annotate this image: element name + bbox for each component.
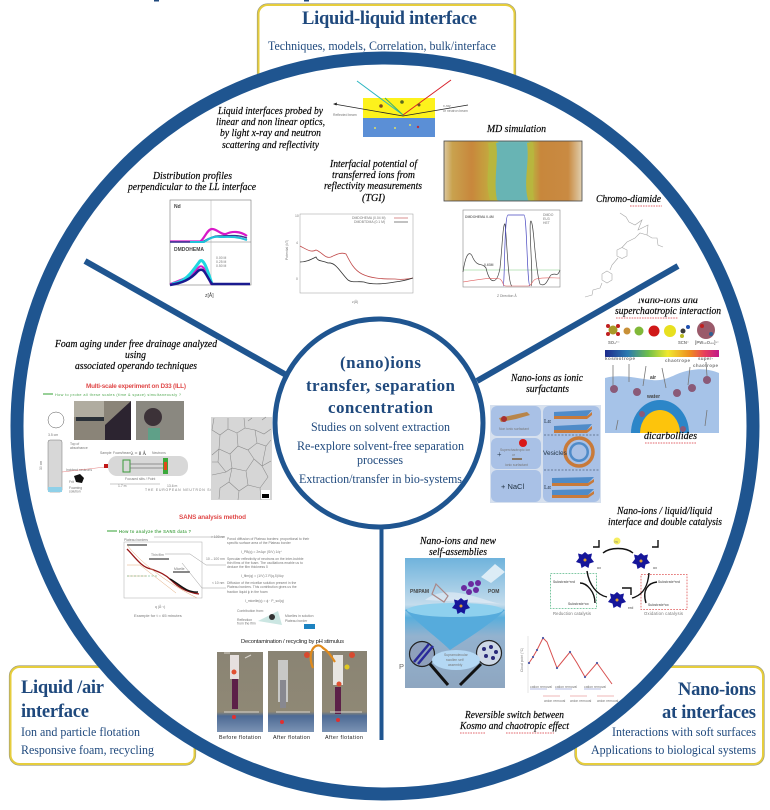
figure: superchaotropic series and assembly: super-: [698, 356, 714, 361]
figure: ionic surfactants panels: Vesicles: [543, 450, 568, 457]
figure: decontamination photos: [217, 639, 367, 741]
caption: nano-ions and superchaotropic: [615, 293, 721, 318]
figure: PNIPAM and POM self-assembly illustration: Supramolecular: [444, 653, 469, 657]
figure: SANS analysis method: < 10 nm: [212, 581, 225, 585]
caption: nano-ions as ionic surfactants: surfactants: [526, 384, 569, 395]
figure: double catalysis cycle: ox: [653, 566, 657, 570]
figure: D33 multi-scale experiment: 1.7 m: [118, 484, 127, 488]
chart: MD concentration profiles: EU3: [543, 217, 550, 221]
chart: reversible switch: anion removal: [570, 699, 592, 703]
figure: decontamination photos: Decontamination / recycling by pH stimulus: [241, 639, 344, 645]
caption: distribution profiles: [127, 171, 256, 193]
caption: nano-ions as ionic surfactants: Nano-ions as ionic: [510, 373, 583, 384]
chart: reversible switch: anion removal: [597, 699, 619, 703]
figure: PNIPAM and POM self-assembly illustration: POM: [488, 589, 499, 595]
chart: reversible switch: cation removal: [584, 685, 606, 689]
chart: potential vs z: 0: [296, 277, 298, 281]
figure: D33 multi-scale experiment: 13.6 m: [167, 484, 178, 488]
figure: ionic surfactants panels: or: [512, 453, 516, 457]
figure: MD simulation snapshot: [444, 141, 582, 201]
figure: SANS analysis method: deduce the film thickness δ: [227, 565, 268, 569]
chart: potential vs z: z(Å): [352, 299, 358, 304]
figure: reflection optics diagram: Reflected beam: [333, 113, 357, 117]
caption: distribution profiles: perpendicular to the LL interface: [127, 182, 256, 193]
figure: D33 multi-scale experiment: λ = 8 Å: [131, 451, 146, 457]
figure: superchaotropic series and assembly: [PW₁₂O₄₀]³⁻: [695, 340, 719, 345]
caption: liquid interfaces probed: [216, 106, 325, 151]
figure: PNIPAM and POM self-assembly illustration: P: [399, 662, 404, 671]
spoke: upper right: [477, 266, 678, 381]
text: liquid-liquid heading: Liquid-liquid interface: [302, 9, 477, 29]
figure: double catalysis cycle: Substrate²ox: [648, 603, 669, 607]
figure: SANS analysis method: Porod diffusion of Plateau borders: proportional to their: [227, 537, 310, 541]
figure: SANS analysis method: specific surface area of the Plateau border: [227, 541, 292, 545]
text: central theme: Studies on solvent extraction: [311, 419, 450, 434]
chart: distribution profiles: Nd: [174, 204, 181, 210]
chart: MD concentration profiles: HET: [543, 221, 550, 225]
figure: superchaotropic series and assembly: SO₄²⁻: [608, 340, 620, 345]
caption: interfacial potential: [324, 159, 422, 204]
spoke: bottom: [380, 528, 384, 740]
figure: superchaotropic series and assembly: chaotrope: [665, 358, 690, 363]
figure: SANS analysis method: [107, 514, 315, 629]
figure: superchaotropic series and assembly: air: [650, 375, 656, 381]
figure: D33 multi-scale experiment: 30 cm: [39, 461, 43, 470]
figure: foam micrograph: [211, 417, 272, 500]
text: liquid/air heading: [21, 678, 154, 757]
figure: ionic surfactants panels: ionic surfactant: [505, 463, 528, 467]
figure: SANS analysis method: I_micelle(q) = ϕ · P_sol(q): [245, 599, 284, 603]
text: nano-ions at interfaces heading: Nano-ions: [678, 680, 756, 700]
figure: SANS analysis method: Example for t = 65 minutes: [134, 613, 182, 618]
figure: D33 multi-scale experiment: Top of: [70, 442, 79, 446]
figure: double catalysis cycle: Oxidation catalysis: [644, 611, 683, 616]
text: liquid/air heading: Responsive foam, recycling: [21, 742, 154, 757]
caption: reversible switch: Reversible switch between: [464, 710, 564, 721]
chart: reversible switch: [520, 636, 619, 703]
chart: reversible switch: cation removal: [530, 685, 552, 689]
chart: distribution profiles: 0.00 M: [216, 256, 227, 260]
text: central theme: [297, 353, 464, 486]
figure: SANS analysis method: Reflection: [237, 618, 252, 622]
chart: MD concentration profiles: 0.63M: [484, 263, 494, 267]
figure: D33 multi-scale experiment: Multi-scale experiment on D33 (ILL): [86, 383, 186, 390]
caption: foam aging: using: [125, 350, 146, 361]
figure: D33 multi-scale experiment: absorbance: [70, 446, 88, 450]
figure: ionic surfactants panels: Lα: [544, 419, 552, 425]
figure: SANS analysis method: from the film: [237, 622, 256, 626]
caption: liquid interfaces probed: by light x-ray and neutron: [220, 128, 321, 139]
figure: ionic surfactants panels: + NaCl: [501, 482, 524, 491]
figure: SANS analysis method: Specular reflectivity of neutrons on the inter-bubble: [227, 557, 304, 561]
figure: ionic surfactants panels: Lα: [544, 485, 552, 491]
figure: ionic surfactants panels: Superchaotropic ion: [500, 448, 530, 452]
caption: foam aging: Foam aging under free drainage analyzed: [54, 339, 218, 350]
caption: nano-ions / liquid/liquid: interface and double catalysis: [608, 517, 722, 528]
figure: PNIPAM and POM self-assembly illustration: [399, 558, 505, 688]
figure: D33 multi-scale experiment: Incident neutrons: [66, 468, 92, 472]
figure: SANS analysis method: I_PB(q) = 2πΔρ² (S/V) 1/q⁴: [241, 550, 282, 554]
figure: chromo-diamide molecular structure: [585, 213, 663, 297]
figure: double catalysis cycle: Substrate¹ox: [568, 602, 589, 606]
figure: superchaotropic series and assembly: water: [646, 394, 660, 400]
caption: reversible switch: Kosmo and chaotropic effect: [459, 721, 570, 732]
figure: SANS analysis method: How to analyze the SANS data ?: [119, 529, 191, 534]
caption: nano-ions as ionic surfactants: [510, 373, 583, 395]
text: liquid/air heading: Ion and particle flotation: [21, 724, 140, 739]
caption: interfacial potential: reflectivity measurements: [324, 181, 422, 192]
figure: D33 multi-scale experiment: 3.5 cm: [48, 433, 58, 437]
figure: D33 multi-scale experiment: Sample: [100, 451, 112, 455]
text: central theme: Re-explore solvent-free separation: [297, 438, 464, 453]
figure: SANS analysis method: SANS analysis method: [179, 514, 246, 521]
box: nano-ions at interfaces: [576, 667, 763, 764]
caption: nano-ions and superchaotropic: Nano-ions and: [637, 295, 699, 306]
chart: MD concentration profiles: [463, 210, 560, 298]
figure: PNIPAM and POM self-assembly illustration: assembly: [448, 663, 463, 667]
figure: ionic surfactants panels: +: [497, 450, 502, 459]
text: liquid-liquid heading: [268, 9, 496, 53]
figure: ionic surfactants panels: [490, 405, 601, 503]
chart: potential vs z: [285, 214, 413, 304]
chart: distribution profiles: [170, 200, 251, 299]
figure: SANS analysis method: Plateau borders. This contribution gives us the: [227, 585, 297, 589]
figure: D33 multi-scale experiment: [39, 383, 227, 494]
chart: reversible switch: cation removal: [555, 685, 577, 689]
figure: D33 multi-scale experiment: Frit: [69, 480, 74, 484]
caption: nano-ions and new self-assemblies: [419, 536, 496, 558]
figure: superchaotropic series and assembly: SCN⁻: [678, 340, 689, 345]
figure: PNIPAM and POM self-assembly illustration: swollen self: [446, 658, 464, 662]
box: liquid-liquid interface: [258, 5, 514, 95]
figure: SANS analysis method: I_film(q) = (1/V) Σ R(q,δ)/4q²: [241, 574, 285, 578]
caption: interfacial potential: transferred ions from: [332, 170, 415, 181]
text: nano-ions at interfaces heading: Applications to biological systems: [591, 742, 756, 757]
figure: double catalysis cycle: Substrate¹red: [553, 580, 575, 584]
text: nano-ions at interfaces heading: at interfaces: [662, 703, 756, 723]
chart: potential vs z: DMDOHEMA (0.04 M): [352, 216, 386, 220]
caption: dicarbollides: dicarbollides: [644, 431, 697, 442]
figure: decontamination photos: After flotation: [325, 735, 363, 741]
caption: nano-ions and superchaotropic: superchaotropic interaction: [615, 306, 721, 317]
text: nano-ions at interfaces heading: [591, 680, 756, 757]
box: liquid/air interface: [10, 667, 194, 764]
chart: distribution profiles: z[Å]: [205, 292, 214, 299]
text: liquid/air heading: Liquid /air: [21, 678, 104, 698]
caption: foam aging: associated operando techniques: [75, 361, 197, 372]
figure: D33 multi-scale experiment: Neutrons: [152, 451, 166, 455]
figure: SANS analysis method: Contribution from:: [237, 609, 264, 613]
caption: MD simulation: MD simulation: [486, 124, 546, 135]
figure: SANS analysis method: Plateau border: [285, 619, 308, 623]
caption: liquid interfaces probed: Liquid interfaces probed by: [217, 106, 323, 117]
text: central theme: (nano)ions: [340, 353, 421, 372]
chart: potential vs z: 10: [295, 214, 299, 218]
figure: double catalysis cycle: [550, 538, 687, 616]
chart: reversible switch: anion removal: [544, 699, 566, 703]
chart: MD concentration profiles: DMDOHEMA 0.4M: [465, 215, 494, 219]
chart: MD concentration profiles: Z Direction Å: [497, 293, 517, 298]
caption: liquid interfaces probed: linear and non linear optics,: [216, 117, 325, 128]
caption: chromo-diamide: Chromo-diamide: [596, 194, 661, 205]
figure: reflection optics diagram: [333, 80, 468, 137]
chart: potential vs z: DMDBTDMA (0.1 M): [354, 220, 385, 224]
chart: potential vs z: 4: [296, 241, 298, 245]
text: central theme: concentration: [328, 398, 434, 417]
figure: SANS analysis method: Plateau borders: [124, 538, 148, 542]
figure: double catalysis cycle: Substrate²red: [658, 580, 680, 584]
caption: reversible switch: [459, 710, 570, 733]
caption: foam aging: [54, 339, 218, 372]
chart: distribution profiles: 0.50 M: [216, 264, 227, 268]
caption: interfacial potential: Interfacial potential of: [329, 159, 419, 170]
caption: liquid interfaces probed: scattering and reflectivity: [222, 140, 319, 151]
figure: SANS analysis method: fraction liquid ϕ in the foam: [227, 590, 268, 594]
figure: D33 multi-scale experiment: Foaming: [69, 486, 82, 490]
figure: D33 multi-scale experiment: Focused slits / Point: [125, 477, 155, 481]
figure: SANS analysis method: Micelles in solution: [285, 614, 314, 618]
figure: double catalysis cycle: ox: [597, 566, 601, 570]
caption: nano-ions / liquid/liquid: Nano-ions / liquid/liquid: [616, 506, 713, 517]
chart: MD concentration profiles: DMDO: [543, 213, 554, 217]
figure: superchaotropic series and assembly: kosmotrope: [605, 356, 635, 361]
spoke: upper left: [85, 261, 288, 376]
figure: PNIPAM and POM self-assembly illustration: PNIPAM: [410, 589, 429, 595]
caption: nano-ions / liquid/liquid: [608, 506, 722, 528]
figure: reflection optics diagram: or neutron beam: [443, 109, 468, 113]
clipped heading remnants at top edge: [154, 0, 309, 2]
text: liquid-liquid heading: Techniques, models, Correlation, bulk/interface: [268, 38, 496, 53]
figure: double catalysis cycle: hν: [614, 540, 618, 544]
chart: reversible switch: Cloud point (°C): [520, 648, 524, 672]
caption: nano-ions and new self-assemblies: Nano-ions and new: [419, 536, 496, 547]
figure: double catalysis cycle: red: [628, 606, 633, 610]
figure: reflection optics diagram: x-ray: [443, 104, 451, 108]
figure: superchaotropic series and assembly: chaotrope: [693, 363, 718, 368]
chart: distribution profiles: DMDOHEMA: [174, 247, 204, 253]
chart: potential vs z: Potential (kT): [285, 240, 289, 260]
figure: D33 multi-scale experiment: solution: [69, 490, 81, 494]
figure: ionic surfactants panels: Non ionic surfactant: [499, 427, 529, 431]
figure: decontamination photos: Before flotation: [219, 735, 261, 741]
text: central theme: Extraction/transfer in bio-systems: [299, 471, 462, 486]
caption: interfacial potential: (TGI): [362, 193, 385, 204]
text: central theme: processes: [357, 452, 403, 467]
figure: D33 multi-scale experiment: How to probe all these scales (time & space) simultaneously ?: [55, 393, 181, 397]
figure: D33 multi-scale experiment: Foam/beam: [113, 451, 131, 455]
figure: SANS analysis method: Micelle: [174, 567, 185, 571]
central circle: [275, 319, 483, 527]
text: nano-ions at interfaces heading: Interactions with soft surfaces: [612, 724, 756, 739]
figure: SANS analysis method: 10 – 100 nm: [206, 557, 225, 561]
figure: SANS analysis method: q (Å⁻¹): [155, 604, 165, 609]
figure: SANS analysis method: > 100 nm: [211, 535, 225, 539]
caption: nano-ions and new self-assemblies: self-assemblies: [429, 547, 487, 558]
figure: decontamination photos: After flotation: [273, 735, 310, 741]
figure: SANS analysis method: Thin film: [151, 553, 164, 557]
figure: superchaotropic series and assembly: [605, 321, 719, 433]
chart: distribution profiles: 0.25 M: [216, 260, 227, 264]
figure: double catalysis cycle: Reduction catalysis: [553, 611, 591, 616]
caption: distribution profiles: Distribution profiles: [152, 171, 232, 182]
text: central theme: transfer, separation: [306, 376, 456, 395]
figure: D33 multi-scale experiment: THE EUROPEAN NEUTRON SOURCE: [145, 488, 227, 492]
figure: SANS analysis method: Diffusion of the micellar solution present in the: [227, 581, 296, 585]
figure: SANS analysis method: thin films of the foam. The oscillations enable us to: [227, 561, 303, 565]
text: liquid/air heading: interface: [21, 702, 89, 722]
